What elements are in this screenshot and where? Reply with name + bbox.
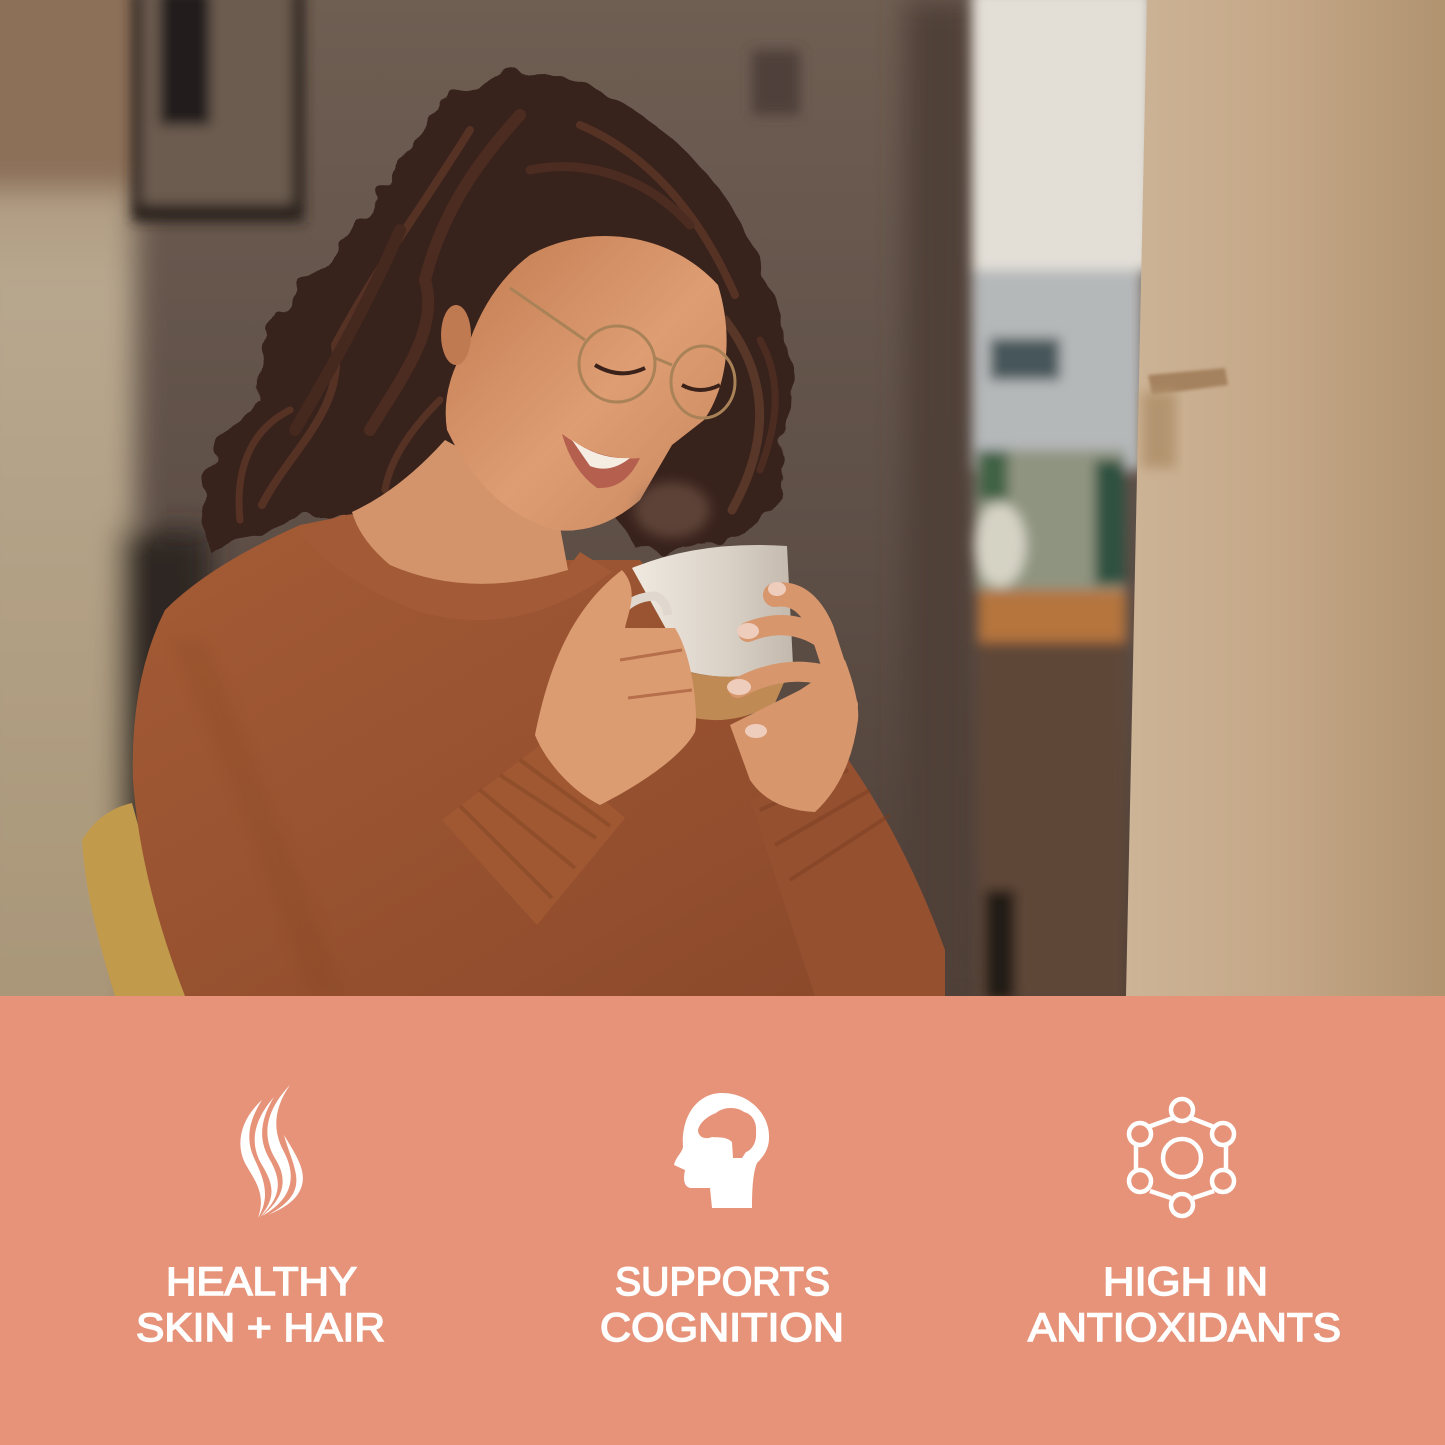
collar <box>298 512 612 620</box>
steam <box>634 482 710 538</box>
label: healthy skin + hair <box>136 1260 385 1350</box>
label: supports cognition: COGNITION <box>600 1306 844 1350</box>
label: healthy skin + hair: HEALTHY <box>166 1260 357 1304</box>
right sleeve <box>750 755 945 996</box>
label: supports cognition: SUPPORTS <box>615 1260 830 1304</box>
photo: woman with a steaming mug <box>0 0 1445 1030</box>
mug <box>610 545 793 720</box>
face <box>441 236 735 531</box>
label: healthy skin + hair: SKIN + HAIR <box>136 1306 385 1350</box>
door <box>1126 0 1445 996</box>
hair <box>203 72 791 552</box>
bottom coral panel <box>0 996 1445 1445</box>
icon: head with brain <box>674 1093 769 1208</box>
chair <box>82 803 185 996</box>
benefit: high in antioxidants <box>1028 1099 1341 1350</box>
neck <box>352 440 568 584</box>
glasses <box>510 288 735 418</box>
label: high in antioxidants <box>1028 1260 1341 1350</box>
lips and smile <box>562 434 640 488</box>
right hand fingers <box>738 594 848 732</box>
sleeve shading <box>170 640 345 996</box>
benefit: supports cognition <box>600 1093 844 1350</box>
hands <box>535 570 858 812</box>
benefit: healthy skin and hair <box>136 1085 385 1350</box>
label: high in antioxidants: ANTIOXIDANTS <box>1028 1306 1341 1350</box>
left cuff <box>442 745 625 925</box>
label: supports cognition <box>600 1260 844 1350</box>
sweater <box>133 512 945 996</box>
icon: hair strands <box>240 1085 303 1218</box>
right hand palm <box>730 660 858 812</box>
label: high in antioxidants: HIGH IN <box>1103 1260 1268 1304</box>
icon: antioxidant molecule <box>1129 1099 1234 1216</box>
nails <box>727 582 786 738</box>
photo background: blurred interior <box>0 0 1445 1030</box>
doorway window view <box>972 0 1152 1002</box>
left hand <box>535 570 696 805</box>
